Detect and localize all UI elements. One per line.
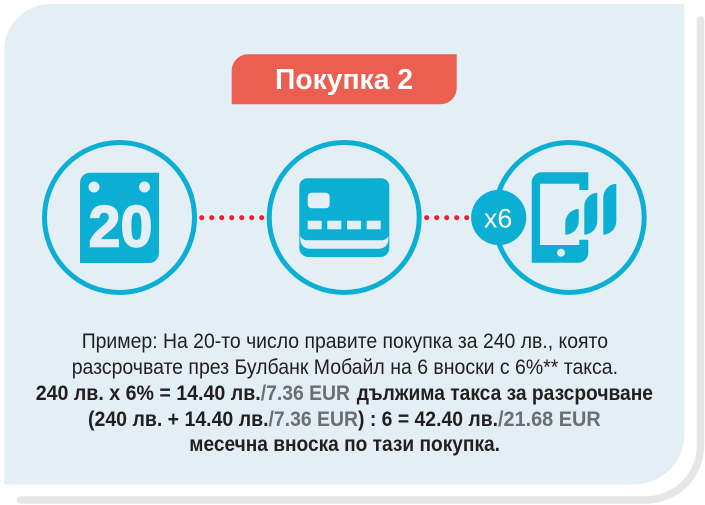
icon: bank card in circle (269, 142, 419, 292)
heading: Покупка 2: Покупка 2 (275, 64, 413, 96)
text block: example: дължима такса за разсрочване (357, 382, 653, 405)
icon: mobile banking phone in circle (494, 142, 644, 292)
badge: x6: x6 (484, 203, 512, 233)
text block: example: Пример: На 20-то число правите покупка за 240 лв., която (82, 330, 608, 353)
icon: calendar in circle (44, 142, 194, 292)
text block: example (36, 330, 653, 456)
connector dots: calendar to card (199, 215, 264, 220)
connector dots: card to phone (424, 215, 469, 220)
text block: example: ) : 6 = 42.40 лв. (358, 408, 498, 431)
text block: example: /7.36 EUR (268, 408, 358, 431)
text block: example: /21.68 EUR (498, 408, 601, 431)
icon: calendar in circle: 20 (88, 194, 152, 260)
heading: Покупка 2 (232, 54, 457, 104)
text block: example: месечна вноска по тази покупка. (189, 433, 500, 456)
badge: x6 (471, 190, 526, 245)
text block: example: разсрочвате през Булбанк Мобайл на 6 вноски с 6%** такса. (72, 356, 618, 379)
text block: example: /7.36 EUR (261, 382, 350, 405)
text block: example: (240 лв. + 14.40 лв. (88, 408, 268, 431)
text block: example: 240 лв. х 6% = 14.40 лв. (36, 382, 261, 405)
